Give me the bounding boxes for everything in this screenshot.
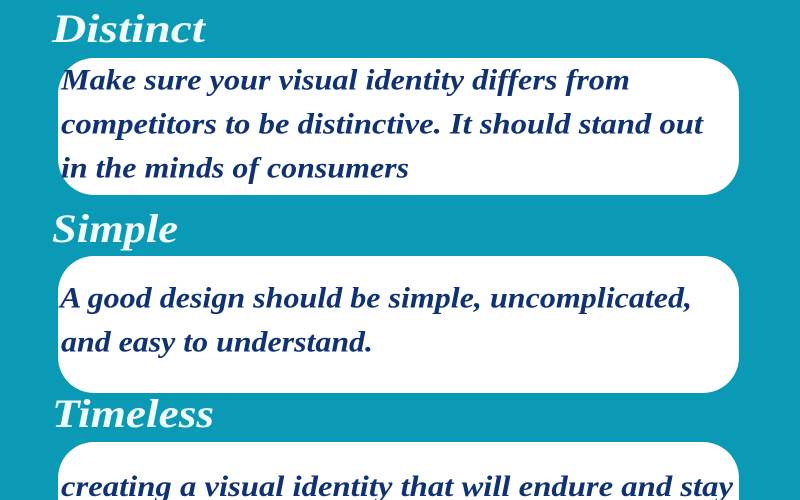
panel: Timeless description (58, 442, 739, 500)
panel: Simple description: A good design should be simple, uncomplicated, (58, 282, 692, 314)
heading: Timeless: Timeless (52, 391, 214, 436)
panel: Distinct description (58, 58, 739, 195)
panel: Distinct description: in the minds of consumers (61, 152, 409, 184)
panel: Simple description (58, 256, 739, 393)
heading: Distinct: Distinct (51, 6, 207, 51)
panel: Distinct description: Make sure your visual identity differs from (60, 64, 630, 96)
panel: Simple description: and easy to understand. (61, 326, 373, 358)
panel: Distinct description: competitors to be distinctive. It should stand out (61, 108, 705, 140)
heading: Simple: Simple (52, 206, 178, 251)
